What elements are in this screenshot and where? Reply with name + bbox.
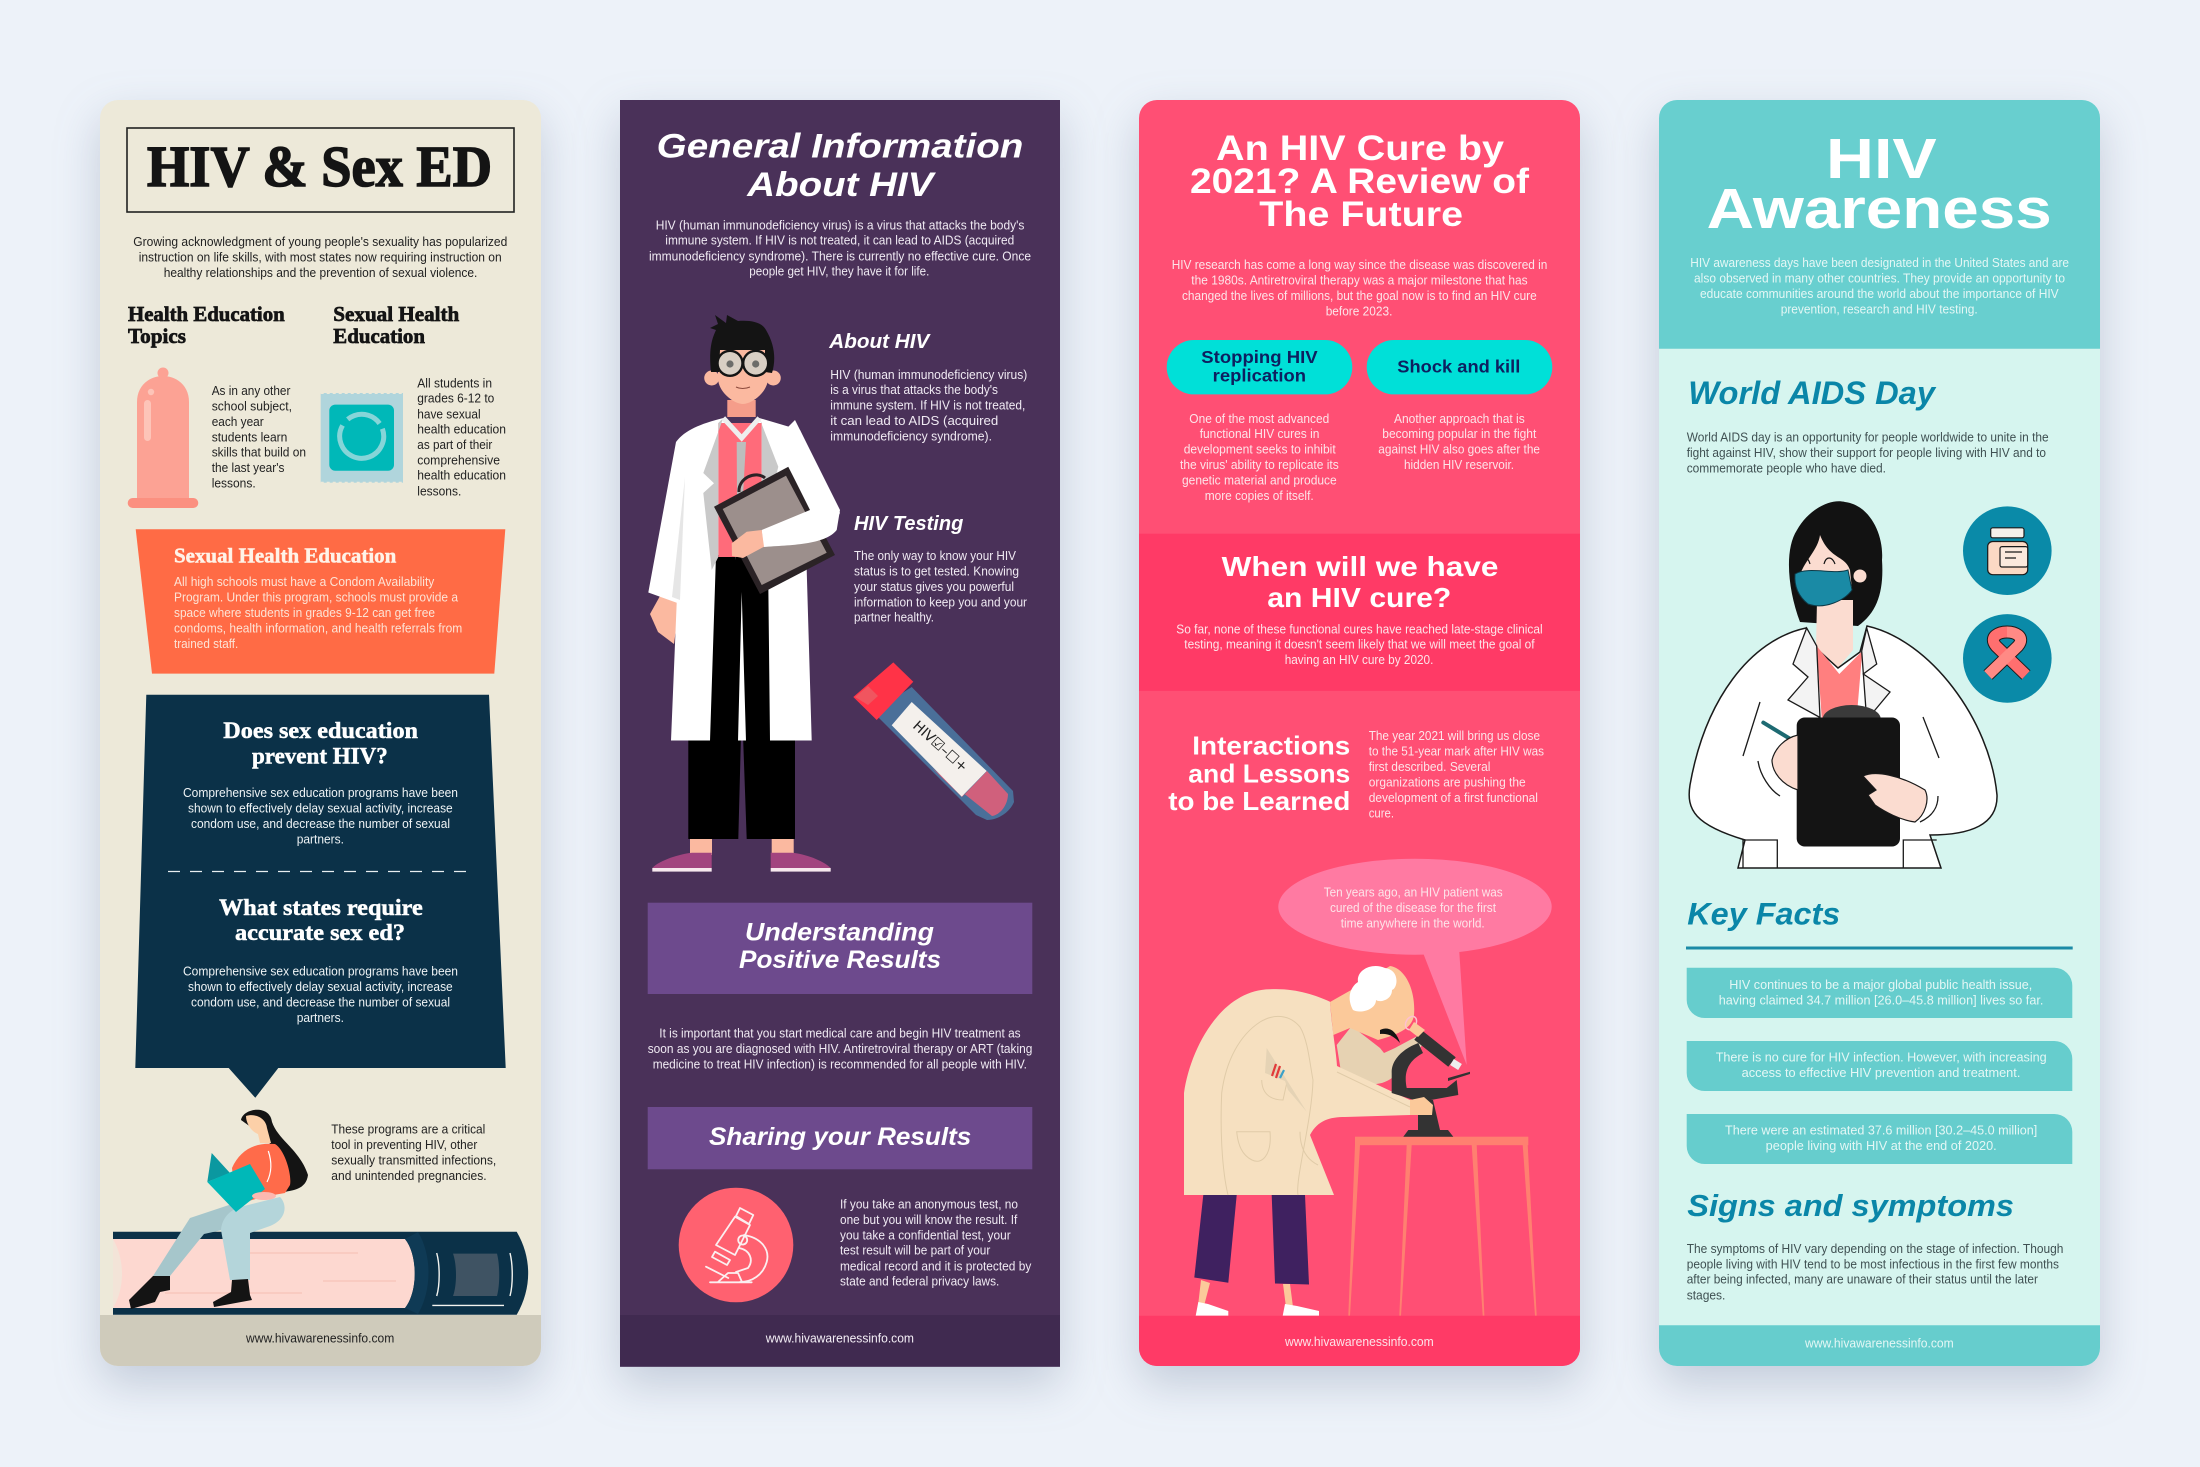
text: HIV testing: partner healthy.	[854, 611, 934, 625]
text: shock and kill: hidden HIV reservoir.	[1404, 458, 1514, 472]
text: HIV testing: The only way to know your HIV	[854, 549, 1017, 563]
text: sharing results: one but you will know the result. If	[840, 1213, 1018, 1227]
footer	[100, 1315, 541, 1366]
text: about HIV: immunodeficiency syndrome).	[830, 430, 992, 444]
arm holding clipboard	[732, 420, 840, 558]
pockets and fold lines	[1743, 702, 1939, 868]
text: the year 2021: The year 2021 will bring us close	[1369, 729, 1540, 743]
mask	[1795, 570, 1852, 606]
text: stopping replication: more copies of itself.	[1205, 489, 1314, 503]
text: signs and symptoms: after being infected, many are unaware of their status until the later	[1687, 1273, 2038, 1287]
banner: understanding positive results: Understanding	[745, 919, 934, 947]
title	[1190, 129, 1529, 234]
pen and hands	[1763, 723, 1927, 822]
text: signs and symptoms: The symptoms of HIV vary depending on the stage of infection. Though	[1687, 1242, 2063, 1256]
speech bubble: cured of the disease for the first	[1330, 901, 1496, 915]
icon: microscope	[679, 1188, 793, 1302]
divider line	[1686, 946, 2073, 950]
intro text: HIV research has come a long way since the disease was discovered in	[1172, 258, 1547, 272]
text: sexual health education: grades 6-12 to	[417, 392, 494, 406]
illustration: large book	[113, 1232, 528, 1315]
title: About HIV	[746, 166, 937, 204]
callout: sex education questions: Comprehensive sex education programs have been	[183, 964, 458, 978]
text: programs are a critical tool: and unintended pregnancies.	[331, 1169, 487, 1183]
text: sharing results: If you take an anonymous test, no	[840, 1198, 1018, 1212]
text: health education topics: As in any other	[212, 384, 290, 398]
heading: sexual health education	[333, 302, 459, 348]
text: about HIV: immune system. If HIV is not treated,	[830, 398, 1025, 412]
header: educate communities around the world about the importance of HIV	[1700, 287, 2059, 301]
text: about HIV: HIV (human immunodeficiency virus)	[830, 368, 1027, 382]
coat details	[1221, 1016, 1410, 1195]
footer	[1659, 1325, 2100, 1366]
text: sexual health education: health education	[417, 469, 506, 483]
footer: www.hivawarenessinfo.com	[1804, 1337, 1954, 1351]
card background	[100, 100, 541, 1366]
callout: sexual health education: condoms, health information, and health referrals from	[174, 621, 462, 635]
footer	[620, 1315, 1060, 1367]
intro text	[649, 218, 1031, 279]
heading: interactions and lessons	[1168, 731, 1350, 816]
panel: HIV & Sex ED	[100, 100, 541, 1366]
speech bubble: time anywhere in the world.	[1341, 917, 1485, 931]
text: stopping replication: genetic material and produce	[1182, 474, 1337, 488]
intro text	[133, 235, 507, 280]
text: HIV testing: information to keep you and your	[854, 595, 1027, 609]
text: health education topics: the last year's	[212, 461, 284, 475]
text: stopping replication: functional HIV cures in	[1200, 427, 1319, 441]
legs and shoes	[652, 735, 831, 872]
pill: stopping HIV replication: replication	[1213, 366, 1306, 386]
icon: awareness ribbon	[1963, 614, 2052, 703]
coat	[1689, 626, 1997, 868]
callout: sexual health education: Program. Under this program, schools must provide a	[174, 591, 458, 605]
fact box 1: having claimed 34.7 million [26.0–45.8 million] lives so far.	[1719, 993, 2043, 1007]
intro text: before 2023.	[1326, 305, 1392, 319]
text: sexual health education: lessons.	[417, 484, 461, 498]
icon: medicine bottle	[1963, 506, 2052, 595]
speech bubble	[1278, 859, 1552, 1065]
text: sharing results: you take a confidential test, your	[840, 1228, 1011, 1242]
fact box 3: There were an estimated 37.6 million [30.2–45.0 million]	[1725, 1123, 2037, 1137]
intro text: HIV (human immunodeficiency virus) is a virus that attacks the body's	[656, 218, 1024, 232]
band: when will we have a cure: an HIV cure?	[1267, 582, 1451, 613]
callout: sex education questions: condom use, and decrease the number of sexual	[191, 817, 450, 831]
microscope	[1392, 1035, 1470, 1137]
band: when will we have a cure: testing, meaning it doesn't seem likely that we will meet the goal of	[1184, 637, 1535, 651]
heading: interactions and lessons: to be Learned	[1168, 786, 1350, 816]
card background	[1659, 100, 2100, 1366]
fact box 1	[1687, 968, 2072, 1018]
callout: sexual health education: space where students in grades 9-12 can get free	[174, 606, 435, 620]
illustration: blood test tube	[853, 662, 1014, 820]
text: sharing results: test result will be part of your	[840, 1244, 990, 1258]
callout: sexual health education: Sexual Health Education	[174, 544, 397, 568]
text: shock and kill: becoming popular in the fight	[1382, 427, 1537, 441]
text: health education topics	[212, 384, 306, 491]
pill: stopping HIV replication: Stopping HIV	[1201, 347, 1318, 367]
heading: health education topics: Health Education	[128, 302, 285, 326]
heading: health education topics: Topics	[128, 324, 186, 348]
text: the year 2021: first described. Several	[1369, 760, 1490, 774]
intro text: instruction on life skills, with most states now requiring instruction on	[139, 250, 502, 264]
text: shock and kill	[1378, 412, 1540, 472]
text: health education topics: school subject,	[212, 400, 292, 414]
icon: condom packet	[321, 393, 403, 483]
text: shock and kill: Another approach that is	[1394, 412, 1525, 426]
callout: sex education questions: shown to effectively delay sexual activity, increase	[188, 980, 453, 994]
intro text: people get HIV, they have it for life.	[749, 265, 929, 279]
text: HIV testing	[854, 549, 1027, 625]
heading: interactions and lessons: Interactions	[1192, 731, 1350, 761]
illustration: male doctor	[648, 315, 840, 872]
text: HIV testing: status is to get tested. Knowing	[854, 565, 1019, 579]
callout: sex education questions: shown to effectively delay sexual activity, increase	[188, 802, 453, 816]
pill: shock and kill: Shock and kill	[1397, 356, 1520, 376]
title: The Future	[1259, 195, 1463, 234]
header: HIV awareness days have been designated in the United States and are	[1690, 256, 2069, 270]
text: the year 2021: development of a first functional	[1369, 791, 1538, 805]
text: treatment: medicine to treat HIV infection) is recommended for all people with HIV.	[653, 1057, 1027, 1071]
callout: sex education questions: Comprehensive sex education programs have been	[183, 786, 458, 800]
text: sexual health education: All students in	[417, 376, 492, 390]
header	[1659, 100, 2100, 349]
banner: understanding positive results	[648, 903, 1032, 994]
clipboard	[714, 467, 835, 594]
header: prevention, research and HIV testing.	[1781, 302, 1978, 316]
far arm	[1337, 1026, 1427, 1084]
callout: sexual health education	[136, 529, 505, 674]
text: the year 2021	[1369, 729, 1544, 820]
heading: sexual health education: Sexual Health	[333, 302, 459, 326]
lab coat	[1184, 989, 1410, 1195]
text: health education topics: each year	[212, 415, 264, 429]
text: world AIDS day	[1687, 430, 2049, 476]
callout: sex education questions: accurate sex ed?	[235, 920, 405, 945]
callout: sexual health education: All high schools must have a Condom Availability	[174, 575, 435, 589]
text: health education topics: students learn	[212, 430, 287, 444]
speech bubble: Ten years ago, an HIV patient was	[1324, 886, 1503, 900]
text: sharing results	[840, 1198, 1032, 1289]
footer: www.hivawarenessinfo.com	[1284, 1335, 1434, 1349]
callout: sexual health education: trained staff.	[174, 637, 238, 651]
intro text: the 1980s. Antiretroviral therapy was a major milestone that has	[1191, 274, 1528, 288]
callout: sex education questions	[135, 695, 506, 1098]
text: sharing results: medical record and it is protected by	[840, 1259, 1032, 1273]
banner: sharing your results: Sharing your Results	[709, 1123, 971, 1151]
text: stopping replication	[1180, 412, 1339, 503]
text: treatment	[648, 1027, 1032, 1071]
text: stopping replication: the virus' ability to replicate its	[1180, 458, 1339, 472]
header: Awareness	[1707, 177, 2052, 241]
banner: sharing your results	[648, 1107, 1032, 1169]
illustration: scientist at microscope	[1184, 966, 1470, 1316]
intro text: changed the lives of millions, but the goal now is to find an HIV cure	[1182, 289, 1537, 303]
lapels	[1788, 628, 1890, 720]
heading: interactions and lessons: and Lessons	[1188, 758, 1350, 788]
band: when will we have a cure: When will we have	[1222, 551, 1498, 582]
neck and face	[1799, 535, 1867, 668]
text: the year 2021: to the 51-year mark after HIV was	[1369, 744, 1544, 758]
panel: HIV Awareness	[1659, 100, 2100, 1366]
heading: about HIV: About HIV	[828, 331, 931, 353]
text: world AIDS day: commemorate people who have died.	[1687, 462, 1886, 476]
footer: www.hivawarenessinfo.com	[765, 1332, 914, 1346]
text: health education topics: lessons.	[212, 477, 256, 491]
band: when will we have a cure: having an HIV cure by 2020.	[1285, 653, 1433, 667]
text: programs are a critical tool: tool in preventing HIV, other	[331, 1138, 477, 1152]
intro text: healthy relationships and the prevention of sexual violence.	[164, 266, 477, 280]
text: signs and symptoms: people living with HIV tend to be most infectious in the first few months	[1687, 1257, 2059, 1271]
fact box 2	[1687, 1041, 2072, 1091]
fact box 2: There is no cure for HIV infection. However, with increasing	[1716, 1051, 2047, 1065]
icon: condom	[128, 368, 198, 508]
panel: General Information About HIV	[620, 100, 1060, 1367]
intro text: immune system. If HIV is not treated, it can lead to AIDS (acquired	[665, 234, 1014, 248]
intro text: Growing acknowledgment of young people's sexuality has popularized	[133, 235, 507, 249]
text: about HIV: is a virus that attacks the body's	[830, 383, 998, 397]
heading: key facts: Key Facts	[1687, 895, 1840, 931]
text: sexual health education: comprehensive	[417, 453, 500, 467]
text: health education topics: skills that build on	[212, 446, 306, 460]
hands	[1409, 1022, 1433, 1115]
band: when will we have a cure: So far, none of these functional cures have reached late-stage clinical	[1176, 622, 1543, 636]
text: stopping replication: One of the most advanced	[1189, 412, 1329, 426]
callout: sex education questions: Does sex education	[223, 718, 418, 743]
heading: HIV testing: HIV Testing	[854, 513, 963, 535]
text: programs are a critical tool: These programs are a critical	[331, 1122, 485, 1136]
header: also observed in many other countries. They provide an opportunity to	[1694, 271, 2065, 285]
open coat: trousers	[710, 555, 770, 741]
header: HIV	[1826, 127, 1937, 191]
neck and head	[704, 315, 781, 417]
head	[1330, 966, 1419, 1043]
banner: understanding positive results: Positive Results	[739, 946, 941, 974]
shirt	[1817, 646, 1862, 718]
text: signs and symptoms: stages.	[1687, 1288, 1725, 1302]
title	[657, 127, 1023, 204]
illustration: blood test tube: HIV☑–☐+	[909, 718, 971, 776]
hair	[1789, 501, 1882, 626]
text: treatment: It is important that you start medical care and begin HIV treatment as	[659, 1027, 1021, 1041]
band: when will we have a cure	[1139, 534, 1580, 691]
text: sexual health education: have sexual	[417, 407, 481, 421]
text: shock and kill: against HIV also goes after the	[1378, 442, 1540, 456]
text: sexual health education	[417, 376, 506, 498]
callout: sex education questions: partners.	[297, 1011, 344, 1025]
trousers and shoes	[1194, 1195, 1319, 1316]
title: 2021? A Review of	[1190, 162, 1529, 201]
heading: sexual health education: Education	[333, 324, 425, 348]
text: about HIV: it can lead to AIDS (acquired	[830, 414, 998, 428]
pill: shock and kill	[1367, 340, 1552, 394]
text: signs and symptoms	[1687, 1242, 2063, 1302]
text: the year 2021: cure.	[1369, 806, 1394, 820]
text: treatment: soon as you are diagnosed with HIV. Antiretroviral therapy or ART (taking	[648, 1042, 1032, 1056]
intro text: immunodeficiency syndrome). There is currently no effective cure. Once	[649, 249, 1031, 263]
text: about HIV	[830, 368, 1027, 444]
title: HIV & Sex ED	[147, 134, 492, 199]
text: HIV testing: your status gives you powerful	[854, 580, 1014, 594]
clipboard	[1797, 705, 1900, 846]
illustration: table	[1348, 1137, 1537, 1316]
text: programs are a critical tool: sexually transmitted infections,	[331, 1153, 496, 1167]
illustration: woman reading	[129, 1110, 308, 1309]
hand	[650, 596, 680, 644]
heading: world AIDS day: World AIDS Day	[1688, 375, 1937, 411]
text: sharing results: state and federal privacy laws.	[840, 1275, 999, 1289]
fact box 3: people living with HIV at the end of 2020.	[1766, 1139, 1997, 1153]
callout: sex education questions: prevent HIV?	[252, 744, 388, 768]
text: world AIDS day: fight against HIV, show their support for people living with HIV and to	[1687, 446, 2046, 460]
shirt and tie	[703, 418, 778, 570]
callout: sex education questions: partners.	[297, 832, 344, 846]
title: General Information	[657, 127, 1023, 165]
heading: health education topics	[128, 302, 285, 348]
footer: www.hivawarenessinfo.com	[245, 1332, 394, 1346]
text: the year 2021: organizations are pushing the	[1369, 776, 1526, 790]
text: stopping replication: development seeks to inhibit	[1184, 442, 1336, 456]
intro text	[1172, 258, 1547, 319]
illustration: female doctor with mask	[1689, 501, 1997, 868]
callout: sex education questions: What states require	[219, 895, 423, 920]
pill: stopping HIV replication	[1167, 340, 1352, 394]
fact box 1: HIV continues to be a major global public health issue,	[1729, 978, 2032, 992]
callout: sex education questions: condom use, and decrease the number of sexual	[191, 995, 450, 1009]
text: sexual health education: health education	[417, 423, 506, 437]
text: programs are a critical tool	[331, 1122, 496, 1183]
card background	[1139, 100, 1580, 1366]
fact box 2: access to effective HIV prevention and treatment.	[1742, 1066, 2020, 1080]
heading: signs and symptoms: Signs and symptoms	[1687, 1188, 2014, 1223]
card background	[620, 100, 1060, 1367]
lab coat	[648, 418, 840, 740]
title: An HIV Cure by	[1216, 129, 1505, 168]
text: sexual health education: as part of their	[417, 438, 492, 452]
panel: An HIV Cure by 2021	[1139, 100, 1580, 1366]
fact box 3	[1687, 1114, 2072, 1164]
footer	[1139, 1316, 1580, 1366]
text: world AIDS day: World AIDS day is an opportunity for people worldwide to unite in the	[1687, 430, 2049, 444]
